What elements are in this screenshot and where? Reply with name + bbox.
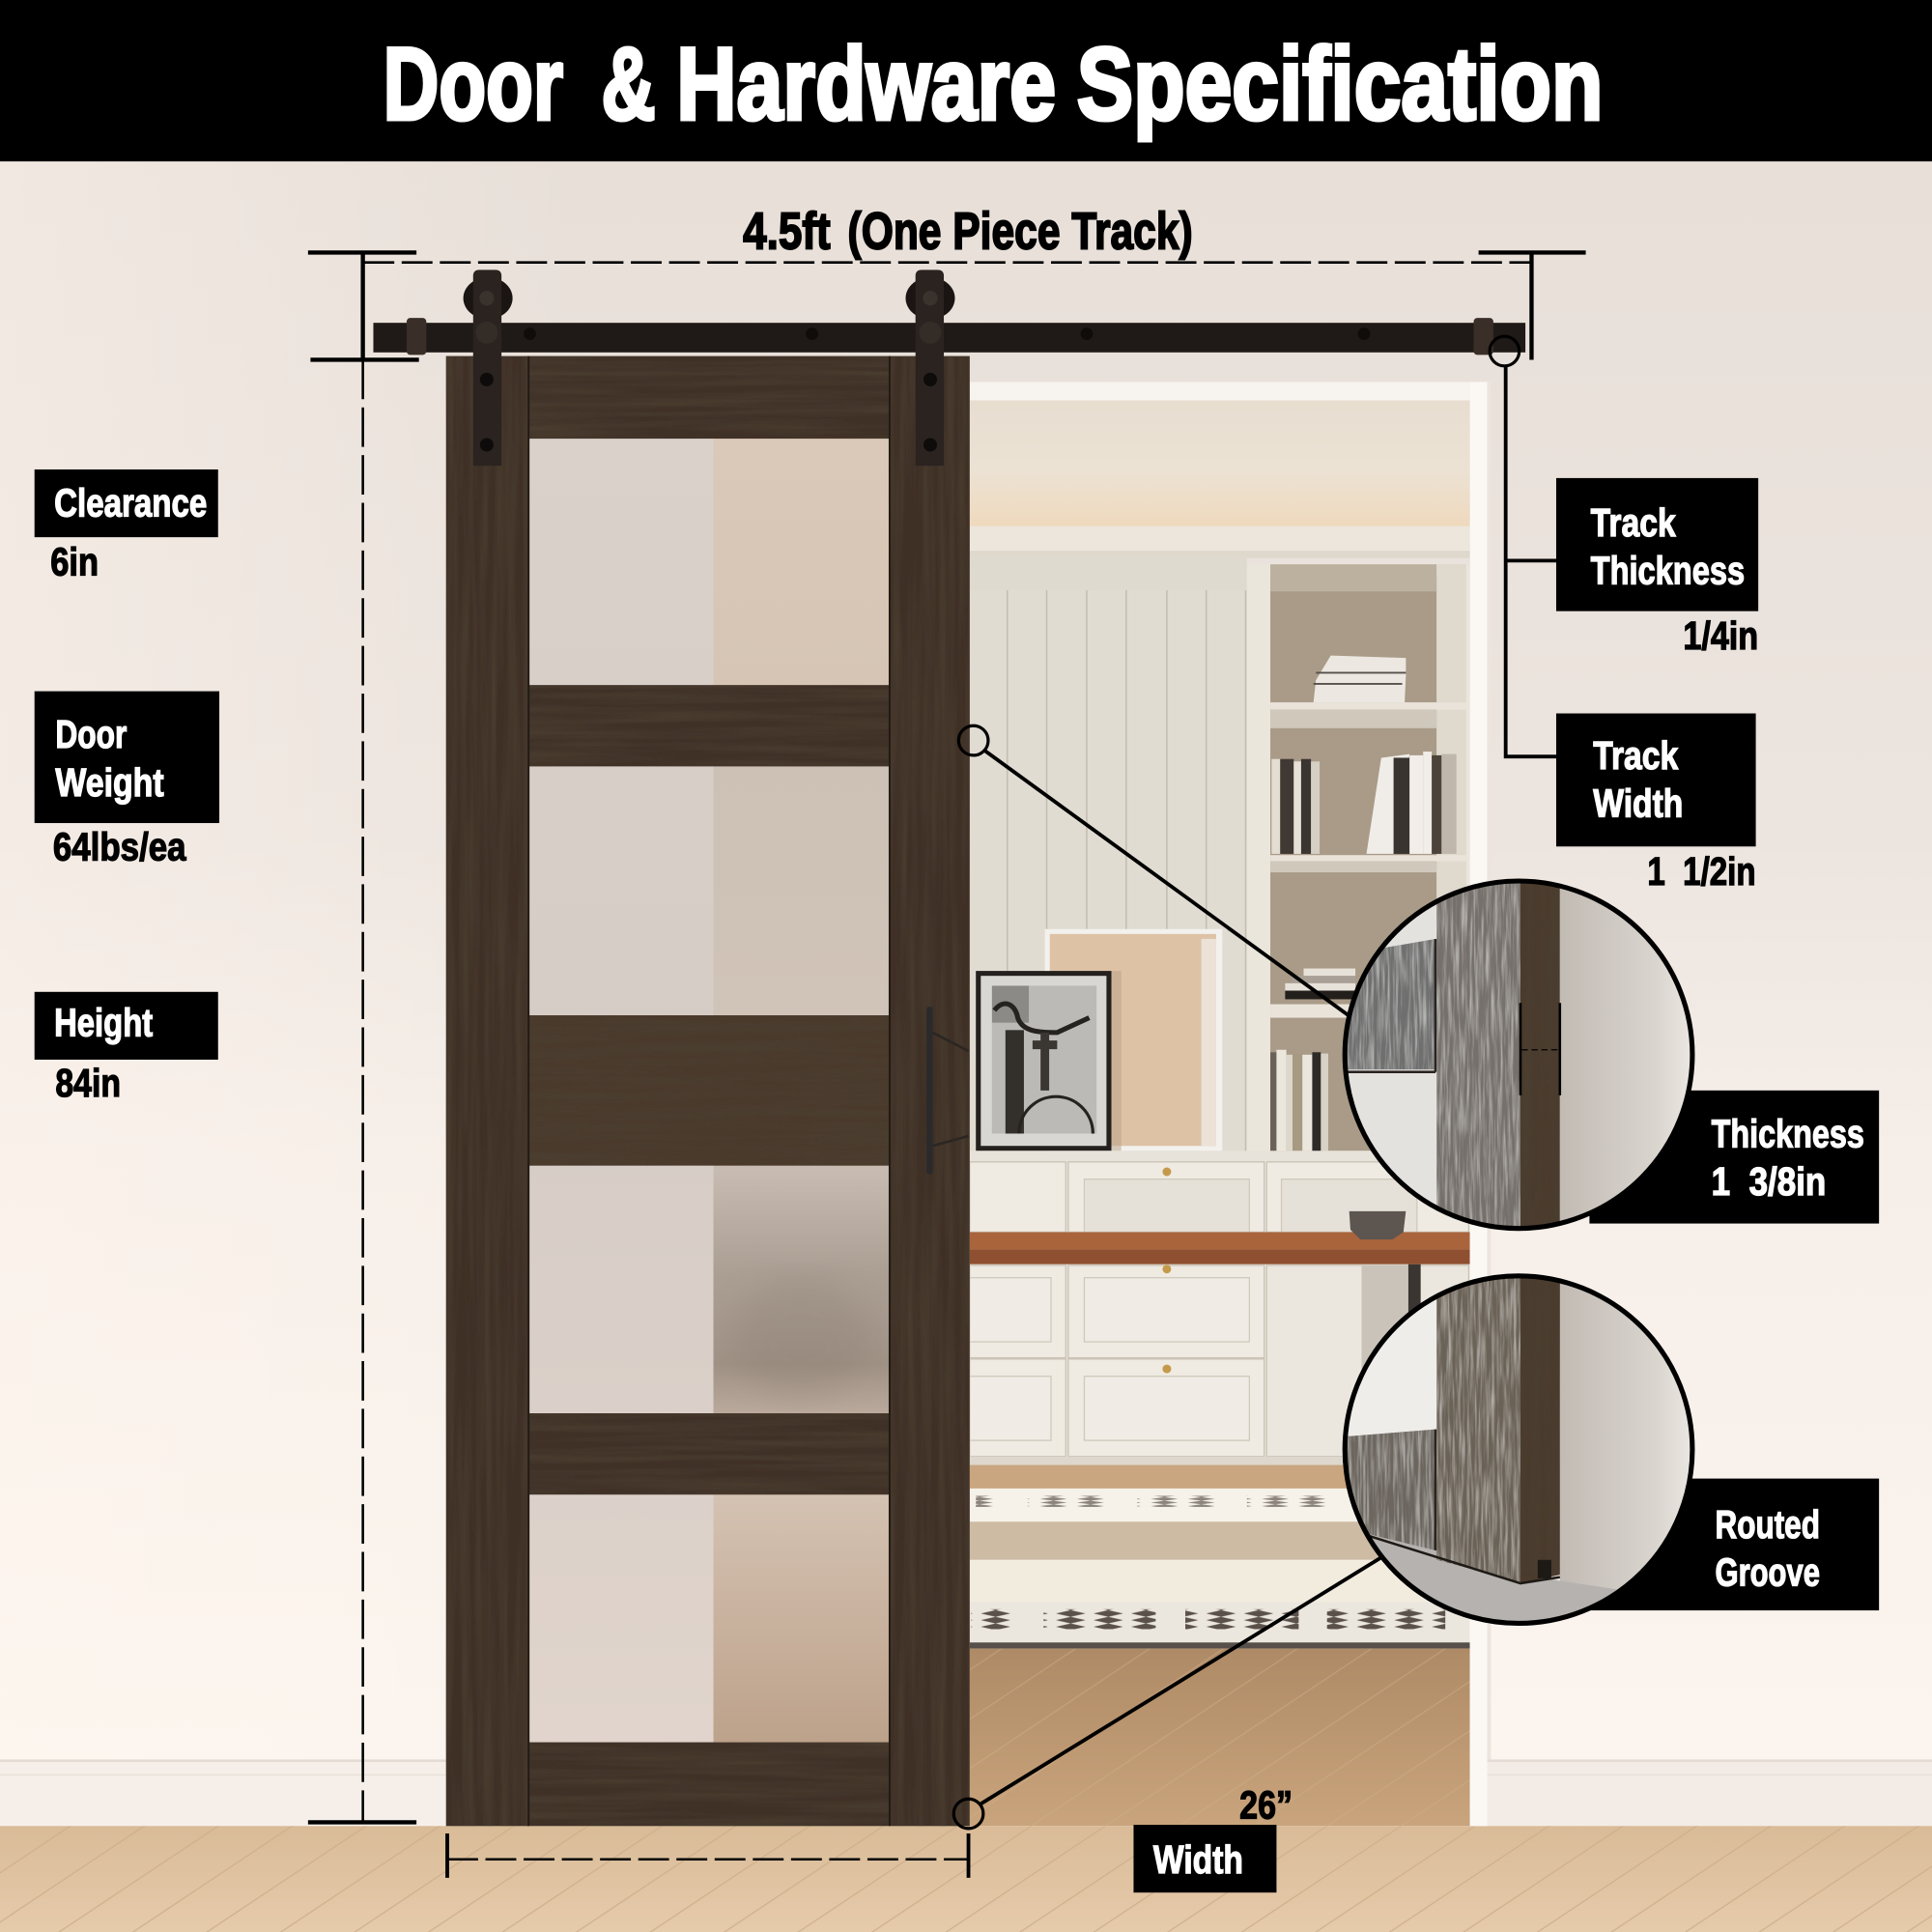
label: track width <box>1556 714 1756 894</box>
frosted glass panes <box>528 439 890 1743</box>
label: track width: Track <box>1593 733 1678 778</box>
thickness pointer <box>958 725 1351 1018</box>
magnifier: door thickness detail <box>1343 880 1700 1233</box>
title bar: Specification <box>1077 26 1603 142</box>
cabinets <box>970 1151 1470 1466</box>
title bar: Hardware <box>676 26 1056 142</box>
books <box>1270 656 1457 1151</box>
wood floor <box>0 1826 1932 1932</box>
label: door thickness <box>1589 1091 1879 1224</box>
track length heading: 4.5ft <box>743 204 831 261</box>
label: width: Width <box>1153 1837 1243 1882</box>
label: door thickness: 1 3/8in <box>1712 1159 1826 1204</box>
track callout lines <box>1490 336 1556 756</box>
label: height: Height <box>54 1001 153 1045</box>
label: routed groove: Routed <box>1716 1502 1820 1547</box>
door handle <box>926 1007 969 1175</box>
door frame <box>1470 382 1491 1826</box>
label: track thickness: Track <box>1591 500 1676 545</box>
room seen through the doorway <box>970 382 1470 1826</box>
label: width: 26” <box>1239 1783 1293 1828</box>
bookcase <box>1247 564 1468 1155</box>
track length heading: (One Piece Track) <box>848 204 1193 261</box>
track length heading <box>743 204 1193 261</box>
label: routed groove <box>1589 1479 1879 1610</box>
label: height <box>35 992 218 1105</box>
track length dimension line <box>363 252 1586 359</box>
label: door weight: 64lbs/ea <box>53 824 186 868</box>
width dimension line <box>447 1833 969 1878</box>
label: track thickness: Thickness <box>1591 549 1745 593</box>
label: routed groove: Groove <box>1716 1550 1820 1595</box>
floor and rug <box>970 1457 1470 1826</box>
label: clearance: 6in <box>50 540 99 584</box>
title bar <box>0 0 1932 161</box>
clearance and height dimension lines <box>308 252 419 1822</box>
routed groove pointer <box>953 1553 1387 1829</box>
sliding barn door <box>446 356 970 1826</box>
title bar: & <box>601 26 656 142</box>
label: track width: 1 1/2in <box>1647 849 1756 894</box>
barn door track <box>373 318 1525 355</box>
title bar: Door <box>384 26 563 142</box>
wooden desk <box>970 1211 1470 1264</box>
label: door weight: Weight <box>55 760 164 805</box>
label: door weight <box>35 692 219 868</box>
right hanger and wheel <box>906 270 955 466</box>
label: door thickness: Thickness <box>1712 1112 1864 1156</box>
label: door weight: Door <box>55 712 127 756</box>
magnifier: routed groove detail <box>1343 1274 1700 1627</box>
label: height: 84in <box>55 1061 121 1105</box>
baseboard <box>0 1759 1932 1826</box>
door stiles and rails <box>446 356 970 1826</box>
label: clearance <box>35 469 218 584</box>
label: track thickness: 1/4in <box>1683 613 1758 658</box>
left hanger and wheel <box>464 270 513 466</box>
framed art <box>976 929 1222 1171</box>
label: track thickness <box>1556 478 1758 658</box>
label: track width: Width <box>1593 781 1683 826</box>
label: width <box>1133 1783 1293 1892</box>
label: clearance: Clearance <box>54 480 207 525</box>
